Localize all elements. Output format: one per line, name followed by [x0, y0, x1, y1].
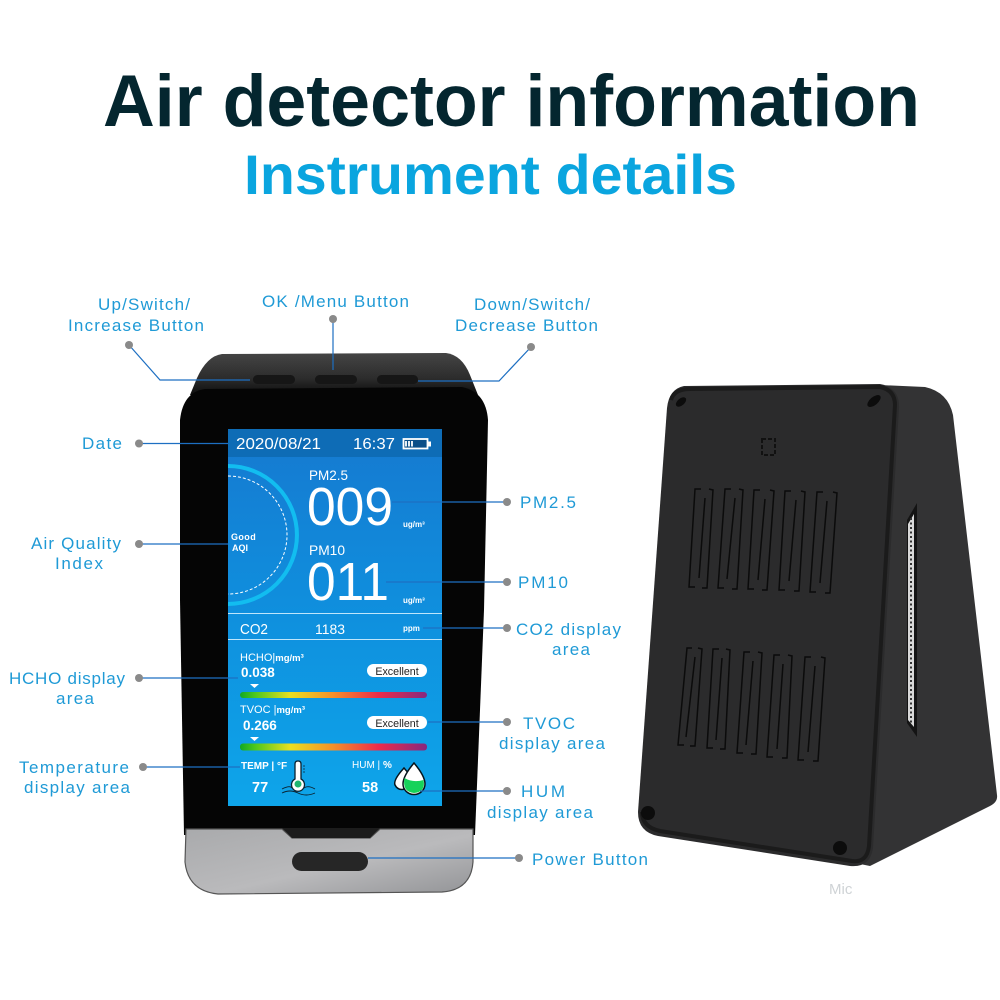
callout: CO2: CO2 display [516, 620, 622, 639]
callout: down button [418, 295, 598, 381]
callout: date [82, 434, 228, 453]
TVOC row: TVOC |mg/m³ [240, 704, 305, 716]
status bar: 2020/08/21 [236, 436, 321, 453]
temperature row: TEMP | °F [241, 761, 287, 772]
AQI gauge [228, 466, 297, 604]
sensor mark [762, 439, 775, 455]
device body [180, 387, 488, 835]
HCHO row: 0.038 [241, 665, 275, 680]
back device [638, 384, 997, 898]
callout: down button: Decrease Button [455, 316, 598, 335]
callout: humidity [420, 782, 594, 822]
status bar: 16:37 [353, 436, 395, 453]
callout: HCHO [9, 669, 238, 708]
callout: humidity: HUM [521, 782, 565, 801]
callout: temperature: Temperature [19, 758, 129, 777]
PM2.5 reading [307, 467, 425, 537]
callout: TVOC: TVOC [523, 714, 575, 733]
battery icon [404, 439, 431, 448]
back face rim [642, 387, 895, 861]
TVOC row: Excellent [375, 718, 419, 730]
HCHO row: HCHO|mg/m³ [240, 652, 304, 664]
screw holes [641, 393, 883, 855]
humidity row: HUM | % [352, 760, 392, 771]
top buttons [253, 375, 418, 384]
back face [638, 384, 899, 866]
front device [180, 353, 488, 894]
callout: power button: Power Button [532, 850, 648, 869]
callout: OK button [262, 292, 409, 370]
callout: temperature [19, 758, 240, 797]
callout: TVOC [428, 714, 606, 753]
callout: up button: Increase Button [68, 316, 204, 335]
AQI gauge: Good [231, 532, 256, 542]
callout: PM2.5: PM2.5 [520, 493, 576, 512]
humidity row: 58 [362, 780, 378, 796]
microphone label: Mic [829, 881, 853, 898]
PM2.5 reading: 009 [307, 477, 393, 537]
callout: air quality index: Air Quality [31, 534, 122, 553]
PM10 reading: PM10 [309, 542, 345, 558]
PM2.5 reading: ug/m³ [403, 520, 425, 529]
icon: thermometer [282, 761, 315, 795]
chrome base with power button [185, 828, 473, 894]
HCHO row [240, 652, 427, 698]
callout: OK button: OK /Menu Button [262, 292, 409, 311]
subtitle: Instrument details [244, 143, 737, 206]
device top face [190, 353, 478, 395]
side speaker grille [907, 503, 917, 737]
HCHO row: Excellent [375, 666, 419, 678]
CO2 row [240, 621, 420, 638]
PM10 reading [307, 542, 425, 612]
lower vent slots [678, 648, 825, 761]
callout: up button: Up/Switch/ [98, 295, 190, 314]
callout: TVOC: display area [499, 734, 606, 753]
callout: CO2 [423, 620, 622, 659]
AQI gauge: AQI [232, 543, 248, 553]
callout: temperature: display area [24, 778, 131, 797]
callout: up button [68, 295, 250, 380]
title: Air detector information [103, 61, 920, 142]
callout: air quality index [31, 534, 228, 573]
CO2 row: ppm [403, 624, 420, 633]
TVOC row [240, 704, 427, 750]
status bar [228, 429, 442, 457]
callout: CO2: area [552, 640, 591, 659]
upper vent slots [689, 489, 837, 593]
PM10 reading: ug/m³ [403, 596, 425, 605]
CO2 row: 1183 [315, 621, 345, 637]
TVOC row: 0.266 [243, 718, 277, 733]
callout: date: Date [82, 434, 122, 453]
side face [840, 385, 997, 866]
callout: PM10: PM10 [518, 573, 568, 592]
callout: humidity: display area [487, 803, 594, 822]
PM10 reading: 011 [307, 552, 389, 612]
callout: HCHO: HCHO display [9, 669, 126, 688]
power button [292, 852, 368, 871]
PM2.5 reading: PM2.5 [309, 467, 348, 483]
icon: water drops [395, 763, 425, 795]
screen [228, 429, 442, 806]
CO2 row: CO2 [240, 621, 268, 638]
callout: air quality index: Index [55, 554, 104, 573]
callout: power button [368, 850, 648, 869]
callout: HCHO: area [56, 689, 95, 708]
temperature row: 77 [252, 780, 268, 796]
temperature row [241, 761, 315, 796]
callout: down button: Down/Switch/ [474, 295, 590, 314]
callout: PM10 [386, 573, 568, 592]
humidity row [352, 760, 425, 796]
callout: PM2.5 [392, 493, 576, 512]
